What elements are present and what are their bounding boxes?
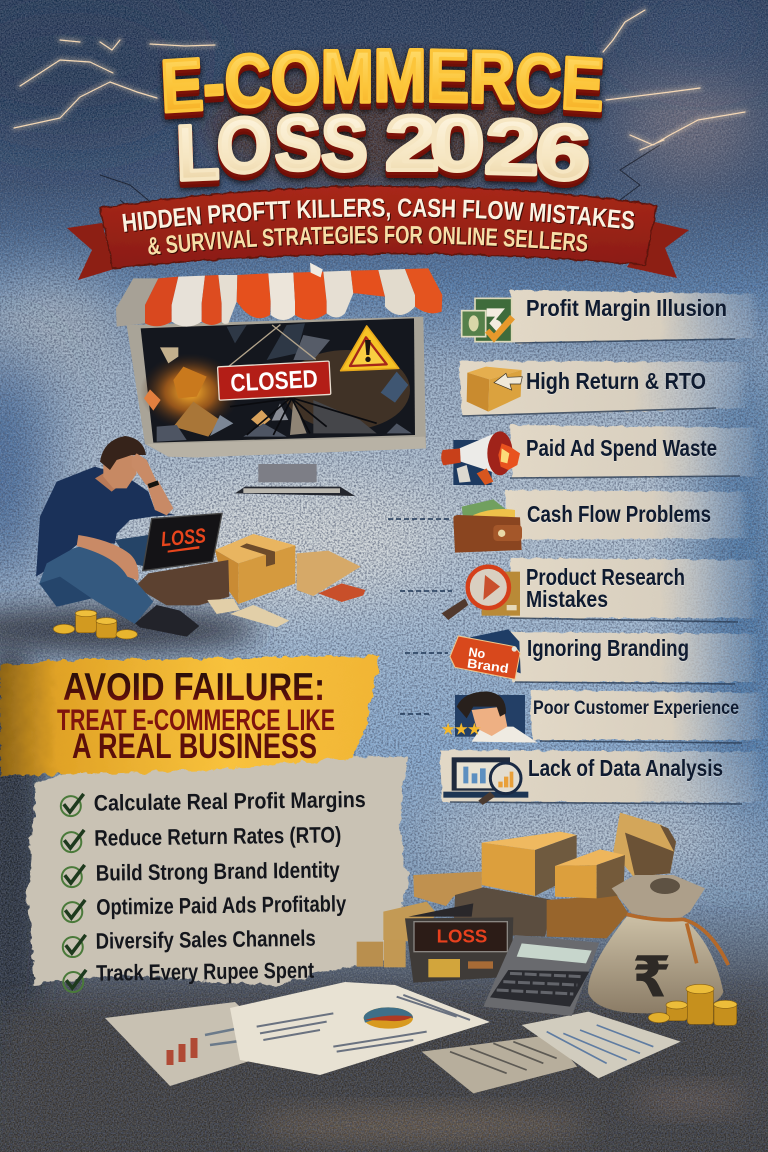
money bag — [588, 875, 728, 1013]
list of loss causes — [388, 290, 765, 805]
closed sign: CLOSED — [230, 365, 318, 398]
icon: wallet — [453, 499, 522, 553]
gold coins — [53, 610, 137, 639]
row: ignoring branding: Ignoring Branding — [527, 635, 689, 661]
icon: no brand tag — [450, 629, 521, 679]
icon: magnifier on product — [442, 567, 520, 620]
item 5: Diversify Sales Channels — [96, 926, 316, 954]
shoe — [135, 605, 199, 637]
avoid failure banner — [0, 656, 380, 776]
raised forearm and hand — [132, 453, 173, 515]
item 5 — [63, 926, 316, 957]
row: lack of data analysis: Lack of Data Analysis — [528, 755, 723, 781]
back leg — [115, 535, 148, 567]
icon: no brand tag: No — [468, 645, 487, 661]
strip shadows — [450, 339, 742, 804]
arm — [77, 535, 139, 581]
head — [100, 436, 146, 488]
icon: unhappy customer with stars: ★★★ — [442, 722, 482, 738]
row: poor customer experience — [442, 691, 739, 743]
title line 1: E-COMMERCE — [159, 34, 606, 128]
item 3: Build Strong Brand Identity — [96, 857, 340, 886]
dashed connectors — [388, 519, 452, 714]
seated man with loss laptop and boxes — [36, 436, 365, 639]
check items — [61, 787, 368, 992]
warning triangle — [341, 326, 399, 371]
envelope and papers — [207, 599, 289, 627]
title line 2: loss: LOSS — [175, 99, 368, 197]
heading: AVOID FAILURE: — [63, 666, 325, 709]
laptop — [143, 513, 222, 571]
pile of boxes, loss wallet, calculator and money bag — [357, 813, 737, 1025]
report sheet center — [230, 982, 490, 1075]
row: cash flow problems: Cash Flow Problems — [527, 501, 711, 527]
icon: no brand tag: Brand — [466, 655, 510, 676]
row: profit margin illusion — [462, 295, 727, 343]
broken storefront monitor — [116, 263, 442, 496]
two-line label: Product Research — [526, 564, 685, 590]
icon: megaphone — [441, 431, 520, 485]
item 6 — [63, 958, 315, 992]
row: cash flow problems — [453, 499, 711, 553]
monitor stand — [235, 464, 355, 496]
gold coin stacks — [648, 984, 737, 1025]
calculator — [483, 935, 599, 1016]
icon: monitor with magnifier — [443, 757, 528, 805]
lightning right — [603, 10, 745, 150]
item 1: Calculate Real Profit Margins — [94, 787, 366, 816]
two-line label: Mistakes — [526, 586, 608, 612]
brown box — [135, 560, 229, 605]
ribbon tails — [67, 222, 689, 280]
spreadsheet — [522, 1012, 681, 1078]
loss wallet: LOSS — [437, 926, 487, 947]
row: ignoring branding — [450, 629, 689, 679]
torn paper — [28, 756, 408, 985]
awning — [116, 263, 442, 327]
red scrap — [318, 583, 365, 602]
ribbon banner — [67, 184, 689, 280]
loss wallet — [405, 903, 513, 983]
yellow torn board — [0, 656, 380, 776]
monitor bottom bezel — [147, 437, 426, 457]
subtitle line 2: & SURVIVAL STRATEGIES FOR ONLINE SELLERS — [148, 226, 588, 256]
item 6: Track Every Rupee Spent — [96, 958, 315, 986]
flattened cardboard — [297, 551, 361, 596]
sweater — [36, 467, 175, 577]
monitor frame — [127, 317, 426, 457]
row: profit margin illusion: Profit Margin Illusion — [526, 295, 727, 321]
scattered financial papers — [105, 982, 681, 1093]
item 2: Reduce Return Rates (RTO) — [94, 822, 341, 851]
chart sheet left — [105, 1002, 285, 1086]
ledger sheet — [422, 1035, 577, 1093]
closed sign — [216, 322, 331, 400]
money bag: ₹ — [632, 947, 671, 1010]
item 4: Optimize Paid Ads Profitably — [96, 891, 347, 920]
back boxes — [357, 813, 676, 967]
subheading line 1: TREAT E-COMMERCE LIKE — [57, 704, 335, 737]
row: paid ad spend waste: Paid Ad Spend Waste — [526, 435, 717, 461]
icon: unhappy customer with stars — [442, 691, 537, 743]
row: paid ad spend waste — [441, 431, 717, 485]
paper strips — [440, 290, 765, 802]
icon: return box — [467, 367, 522, 412]
subtitle line 1: HIDDEN PROFTT KILLERS, CASH FLOW MISTAKES — [122, 198, 636, 233]
neck — [95, 473, 120, 492]
row: lack of data analysis — [443, 755, 723, 805]
checklist paper — [28, 756, 408, 992]
ribbon main band — [100, 186, 657, 268]
row: high return and rto — [467, 367, 706, 412]
row: product research mistakes — [442, 564, 685, 620]
shattered screen — [140, 318, 415, 443]
item 4 — [62, 891, 347, 922]
front leg — [39, 544, 153, 624]
lightning left — [14, 40, 215, 128]
yellow box — [215, 534, 295, 604]
icon: money — [462, 298, 515, 343]
title — [159, 34, 606, 197]
two-line label — [526, 564, 685, 612]
subheading line 2: A REAL BUSINESS — [72, 727, 317, 766]
title line 2: year: 2026 — [385, 100, 593, 197]
row: high return and rto: High Return & RTO — [526, 368, 706, 394]
laptop: LOSS — [160, 524, 207, 551]
